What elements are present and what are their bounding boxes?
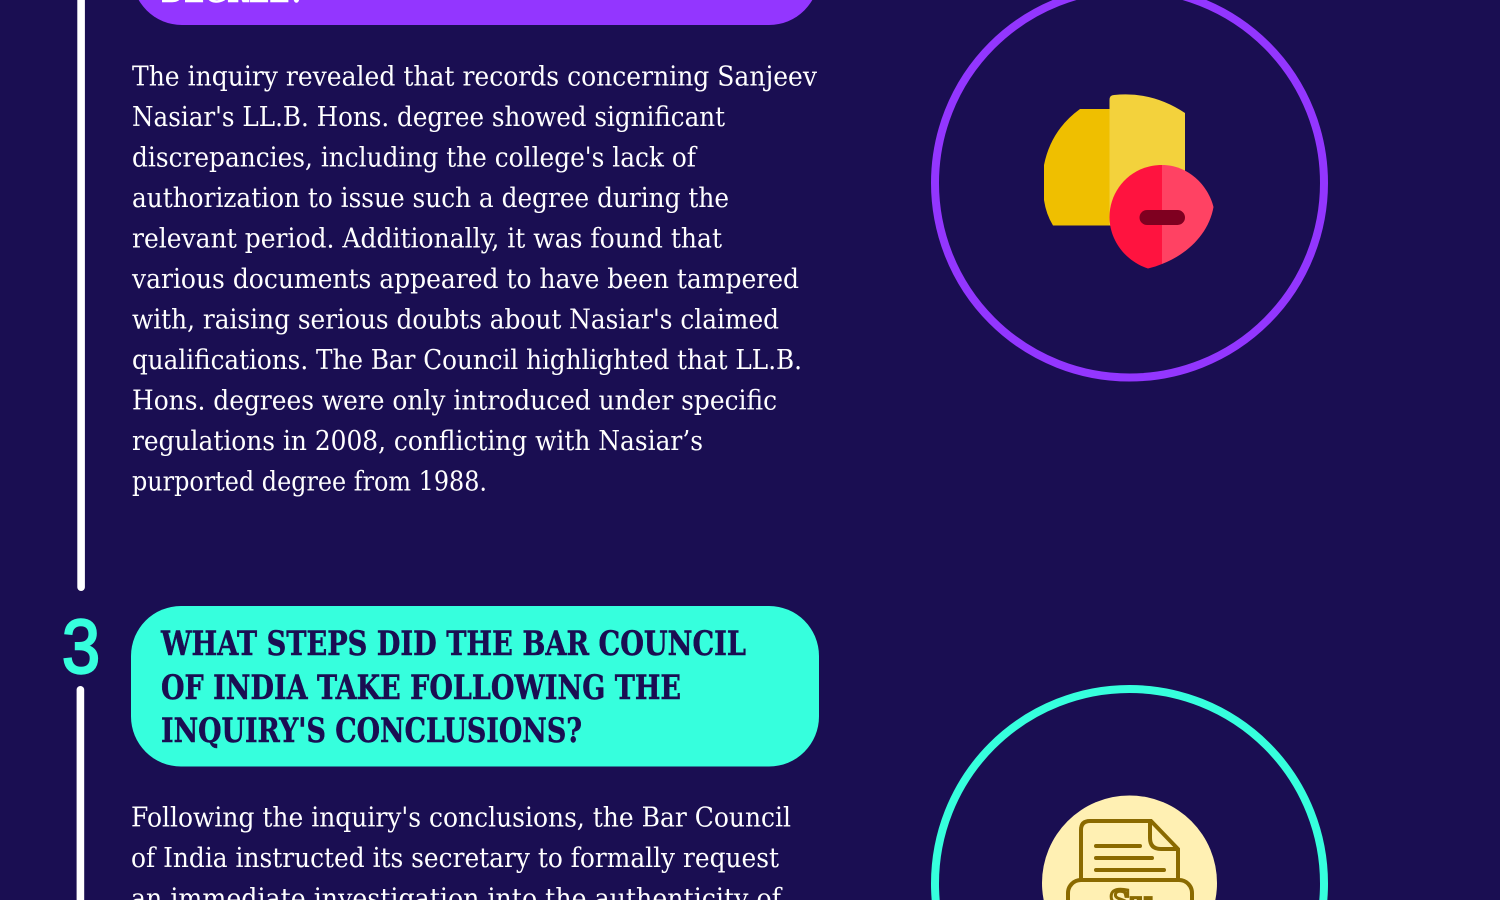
text block: step 3 answer xyxy=(131,802,791,900)
text block: step 2 answer: Hons. degrees were only introduced under specific xyxy=(132,384,777,416)
text block: step 2 answer: discrepancies, including the college's lack of xyxy=(132,142,698,174)
text block: step 2 answer: regulations in 2008, conflicting with Nasiar’s xyxy=(132,425,703,457)
text block: step 2 answer: purported degree from 1988. xyxy=(132,466,487,498)
text block: step 2 answer: relevant period. Additionally, it was found that xyxy=(132,222,722,254)
icon ring: teal xyxy=(935,689,1324,900)
panel: step 3 heading pill: WHAT STEPS DID THE BAR COUNCIL xyxy=(160,624,746,664)
text block: step 2 answer: with, raising serious doubts about Nasiar's claimed xyxy=(132,304,779,336)
panel: step 2 heading pill xyxy=(132,0,819,25)
icon: document with warning shield xyxy=(1044,94,1214,268)
icon: document with signature xyxy=(1042,796,1217,900)
text block: step 2 answer: various documents appeared to have been tampered xyxy=(131,263,799,295)
text block: step 2 answer: The inquiry revealed that records concerning Sanjeev xyxy=(132,60,817,92)
text block: step 3 answer: of India instructed its secretary to formally request xyxy=(131,842,779,874)
text block: step 2 answer xyxy=(131,60,817,498)
panel: step 3 heading pill xyxy=(131,606,819,766)
step number 3: 3 xyxy=(62,606,100,690)
timeline segment: step 3 xyxy=(77,686,84,900)
text block: step 2 answer: Nasiar's LL.B. Hons. degree showed significant xyxy=(132,101,725,133)
text block: step 2 answer: authorization to issue such a degree during the xyxy=(132,182,729,214)
panel: step 3 heading pill: OF INDIA TAKE FOLLOWING THE xyxy=(161,668,681,708)
text block: step 3 answer: Following the inquiry's conclusions, the Bar Council xyxy=(131,802,791,834)
text block: step 2 answer: qualifications. The Bar Council highlighted that LL.B. xyxy=(132,344,802,376)
panel: step 3 heading pill: INQUIRY'S CONCLUSIONS? xyxy=(161,711,582,751)
timeline segment: step 2 xyxy=(77,0,85,591)
icon ring: purple xyxy=(935,0,1324,378)
